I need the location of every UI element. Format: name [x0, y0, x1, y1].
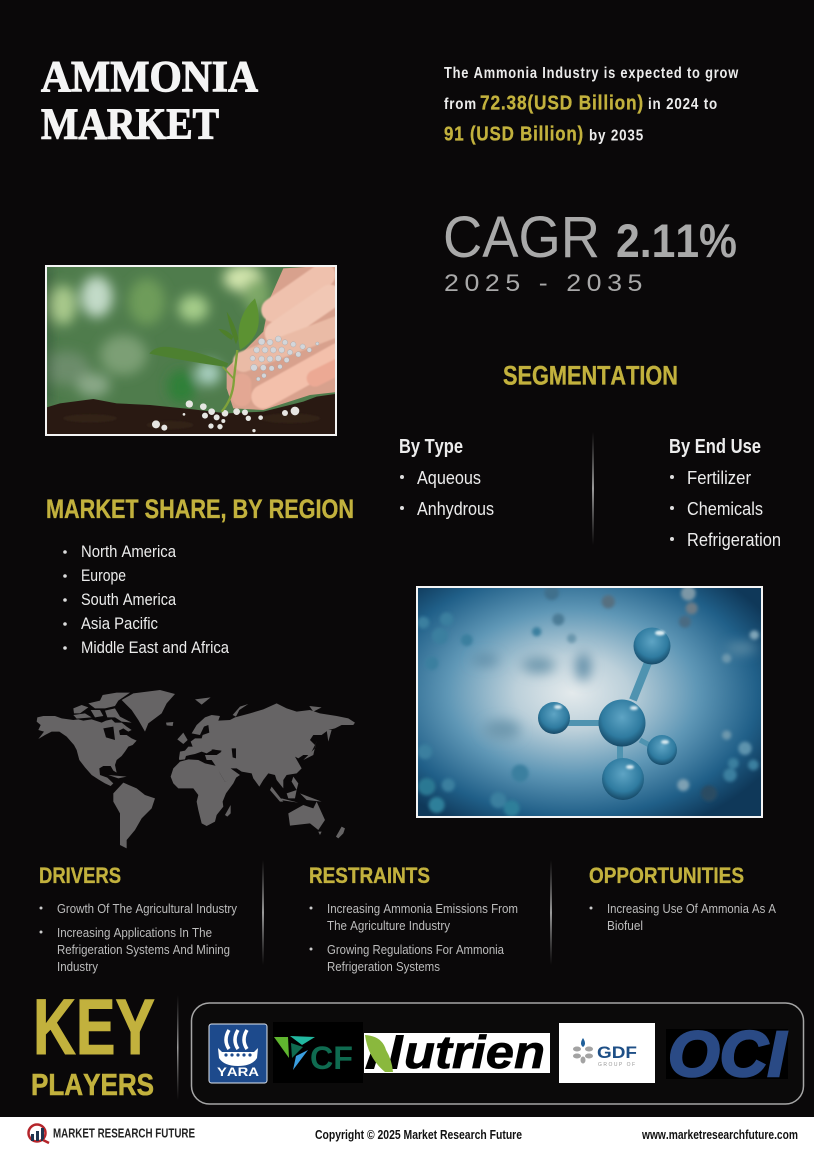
segment column: by end use: By End Use	[669, 435, 761, 458]
segment column: by type: By Type	[399, 435, 463, 458]
panel: drivers: Growth Of The Agricultural Industry	[57, 901, 237, 916]
market growth summary	[444, 65, 739, 146]
logo: Yara	[209, 1024, 267, 1083]
segment column: by type	[399, 435, 494, 519]
segment column: by end use: Refrigeration	[687, 529, 781, 550]
panel: opportunities	[589, 863, 776, 933]
CAGR callout: CAGR	[443, 205, 600, 270]
segment column: by type: Aqueous	[417, 467, 481, 488]
segment column: by type: Anhydrous	[417, 498, 494, 519]
heading: key players	[31, 982, 155, 1102]
copyright: Copyright © 2025 Market Research Future	[315, 1127, 522, 1142]
panel: company logos	[192, 1003, 804, 1104]
pellets	[250, 336, 319, 381]
panel: restraints: Growing Regulations For Ammonia	[327, 942, 505, 957]
logo: Nutrien	[364, 1026, 550, 1078]
segment column: by end use: Fertilizer	[687, 467, 751, 488]
segment column: by end use: Chemicals	[687, 498, 763, 519]
logo: GDF: GROUP OF	[598, 1062, 635, 1068]
title: MARKET	[41, 100, 219, 148]
logo: Market Research Future	[28, 1124, 195, 1143]
market growth summary: 72.38(USD Billion)	[480, 92, 644, 114]
CAGR callout: 2025 - 2035	[444, 270, 648, 297]
panel: restraints	[309, 863, 518, 974]
panel: drivers: Increasing Applications In The	[57, 925, 212, 940]
soil	[47, 394, 335, 434]
market growth summary: in 2024 to	[648, 96, 718, 113]
market growth summary: from	[444, 96, 477, 113]
panel: restraints: RESTRAINTS	[309, 863, 430, 888]
panel: restraints: Increasing Ammonia Emissions From	[327, 901, 518, 916]
region list	[63, 543, 230, 657]
panel: opportunities: Increasing Use Of Ammonia As A	[607, 901, 776, 916]
region list: North America	[81, 543, 177, 561]
panel: drivers: DRIVERS	[39, 863, 121, 888]
title: AMMONIA	[41, 52, 258, 101]
logo: Nutrien: utrien	[404, 1026, 545, 1078]
seedling	[222, 350, 237, 412]
molecule atoms	[634, 628, 670, 664]
photo: seedling and fertilizer	[43, 265, 340, 438]
heading: market share by region: MARKET SHARE, BY REGION	[46, 494, 354, 524]
panel: restraints: Refrigeration Systems	[327, 959, 440, 974]
market growth summary: by 2035	[589, 128, 644, 144]
panel: opportunities: Biofuel	[607, 918, 643, 933]
molecule bonds	[568, 662, 652, 759]
title	[41, 52, 258, 148]
logo: Yara: YARA	[217, 1065, 259, 1079]
CAGR callout	[443, 205, 737, 297]
heading: key players: PLAYERS	[31, 1067, 154, 1102]
market growth summary: 91 (USD Billion)	[444, 122, 584, 146]
logo: OCI: OCI	[668, 1018, 787, 1090]
logo: GDF: GDF	[597, 1043, 637, 1062]
panel: opportunities: OPPORTUNITIES	[589, 863, 744, 888]
heading: key players: KEY	[33, 982, 155, 1071]
heading: segmentation: SEGMENTATION	[503, 360, 678, 390]
logo: CF: CF	[310, 1040, 353, 1076]
panel: drivers	[39, 863, 237, 974]
panel: drivers: Refrigeration Systems And Mining	[57, 942, 230, 957]
CAGR callout: 2.11%	[616, 214, 737, 267]
footer	[0, 1117, 814, 1150]
segment column: by end use	[669, 435, 781, 550]
logo: Market Research Future: MARKET RESEARCH FUTURE	[53, 1126, 195, 1140]
region list: South America	[81, 591, 177, 609]
panel: restraints: The Agriculture Industry	[327, 918, 450, 933]
panel: drivers: Industry	[57, 959, 98, 974]
photo: ammonia molecule	[416, 585, 763, 818]
market growth summary: The Ammonia Industry is expected to grow	[444, 65, 739, 82]
logo: CF	[273, 1022, 363, 1083]
region list: Middle East and Africa	[81, 639, 230, 657]
logo: GDF	[559, 1023, 655, 1083]
region list: Asia Pacific	[81, 615, 158, 633]
hand	[227, 265, 340, 410]
world map	[37, 690, 355, 848]
region list: Europe	[81, 567, 126, 585]
